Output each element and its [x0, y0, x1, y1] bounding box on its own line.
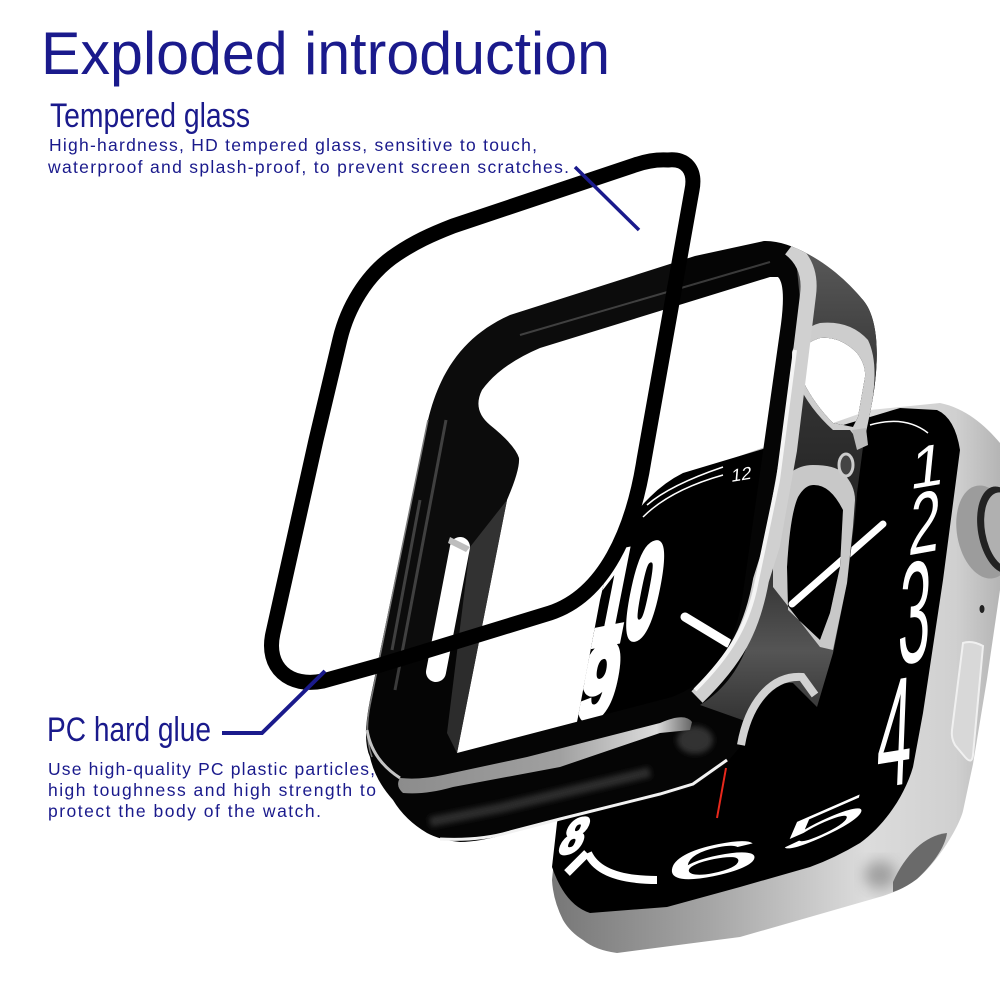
shadow beside speaker	[864, 861, 896, 889]
digital crown	[949, 481, 1000, 583]
lower body sheen	[430, 772, 650, 822]
PC hard glue description: protect the body of the watch.	[48, 801, 321, 821]
12 numeral: 12	[731, 463, 752, 486]
bold left numerals: 10	[584, 513, 675, 674]
speaker grille	[893, 833, 947, 892]
hook detail	[852, 428, 868, 450]
silver band	[697, 248, 809, 697]
leader line: tempered glass	[575, 167, 639, 230]
tempered glass description: High-hardness, HD tempered glass, sensitive to touch,	[49, 135, 537, 155]
right numerals	[660, 429, 948, 896]
dial rim hairlines	[643, 421, 928, 517]
left rim highlight	[367, 420, 428, 757]
PC hard glue heading: PC hard glue	[47, 711, 211, 749]
silver highlight right	[695, 350, 795, 690]
PC hard glue text block	[47, 711, 376, 821]
microphone hole	[980, 605, 984, 613]
bottom-left silver trim	[367, 730, 400, 778]
tempered glass ring	[271, 160, 693, 682]
right numerals: 1	[908, 429, 948, 502]
hinge detail	[839, 454, 853, 476]
dial lower curve (7)	[567, 853, 657, 880]
bold left numerals: 9	[569, 620, 630, 745]
right side face	[700, 248, 877, 722]
minute hand	[792, 524, 883, 604]
case frame	[366, 241, 877, 842]
tempered glass heading: Tempered glass	[50, 97, 250, 135]
watch body	[552, 403, 1000, 953]
title: Exploded introduction	[41, 20, 610, 87]
bottom white edge line	[440, 760, 727, 839]
silver trim right	[430, 248, 809, 822]
left wall reflections	[392, 420, 446, 690]
bumper case	[366, 241, 877, 842]
bold left numerals	[558, 540, 664, 856]
left wall band	[447, 500, 507, 753]
hour hand	[685, 617, 728, 643]
bold left numerals: 8	[552, 807, 597, 867]
upper cutout rim	[792, 323, 875, 447]
right numerals: 4	[874, 644, 915, 823]
top frame reflection	[520, 262, 770, 335]
second hand	[717, 768, 726, 818]
watch side shading	[864, 861, 896, 889]
bottom silver bar	[398, 717, 692, 793]
watch dial	[552, 408, 960, 913]
right numerals: 3	[895, 530, 934, 696]
right numerals: 6	[660, 826, 766, 896]
glossy lower blob	[677, 726, 713, 754]
right numerals: 5	[775, 780, 875, 866]
tempered glass text block	[47, 97, 569, 177]
button slot	[436, 547, 460, 672]
tempered glass description: waterproof and splash-proof, to prevent screen scratches.	[47, 157, 569, 177]
PC hard glue description: high toughness and high strength to	[48, 780, 376, 800]
button slot cap	[448, 537, 470, 552]
notch silver rim	[741, 677, 815, 745]
leader line: PC hard glue	[222, 671, 325, 733]
PC hard glue description: Use high-quality PC plastic particles,	[48, 759, 375, 779]
lower cutout rim	[773, 465, 855, 650]
button	[952, 642, 983, 761]
right numerals: 2	[906, 470, 944, 575]
watch	[552, 403, 1000, 953]
